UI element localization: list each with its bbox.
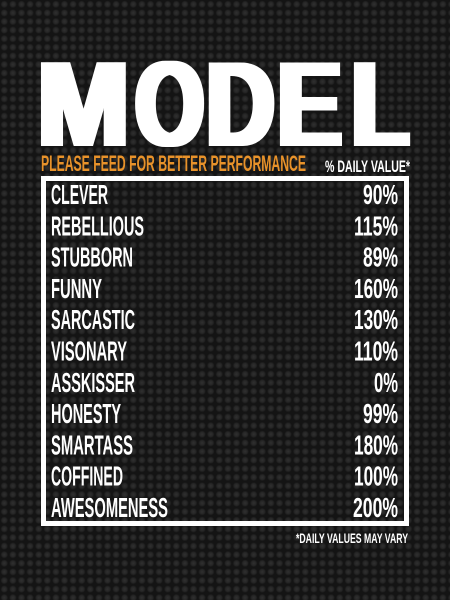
row: smartass: SMARTASS <box>51 429 133 460</box>
row: awesomeness <box>51 492 398 523</box>
row: smartass <box>51 429 398 460</box>
row: coffined: COFFINED <box>51 461 123 492</box>
row: sarcastic <box>51 304 398 335</box>
row: stubborn <box>51 242 398 273</box>
title: D <box>206 36 274 173</box>
row: clever: 90% <box>363 179 398 210</box>
row: clever: CLEVER <box>51 179 108 210</box>
table border <box>44 178 406 524</box>
row: stubborn: STUBBORN <box>51 242 133 273</box>
row: visonary: 110% <box>354 336 398 366</box>
row: smartass: 180% <box>354 429 398 460</box>
row: visonary <box>51 336 398 366</box>
row: asskisser: ASSKISSER <box>51 367 135 398</box>
row: honesty: 99% <box>363 398 398 429</box>
title: L <box>352 36 409 173</box>
row: honesty: HONESTY <box>51 398 121 429</box>
row: honesty <box>51 398 398 429</box>
panel: nutrition table <box>44 178 406 524</box>
row: awesomeness: AWESOMENESS <box>51 492 168 523</box>
row: sarcastic: SARCASTIC <box>51 304 135 335</box>
row: clever <box>51 179 398 210</box>
row: rebellious: REBELLIOUS <box>51 210 144 241</box>
title <box>38 36 409 173</box>
row: visonary: VISONARY <box>51 336 127 366</box>
title: E <box>278 36 342 173</box>
row: rebellious: 115% <box>354 210 398 241</box>
title: O <box>136 36 204 172</box>
row: funny: 160% <box>354 273 398 304</box>
row: sarcastic: 130% <box>354 304 398 335</box>
row: awesomeness: 200% <box>353 492 398 523</box>
row: funny: FUNNY <box>51 273 102 304</box>
row: asskisser: 0% <box>374 367 398 398</box>
row: funny <box>51 273 398 304</box>
row: coffined: 100% <box>354 461 398 492</box>
row: asskisser <box>51 367 398 398</box>
title: M <box>38 36 129 172</box>
row: coffined <box>51 461 398 492</box>
row: stubborn: 89% <box>363 242 398 273</box>
row: rebellious <box>51 210 398 241</box>
